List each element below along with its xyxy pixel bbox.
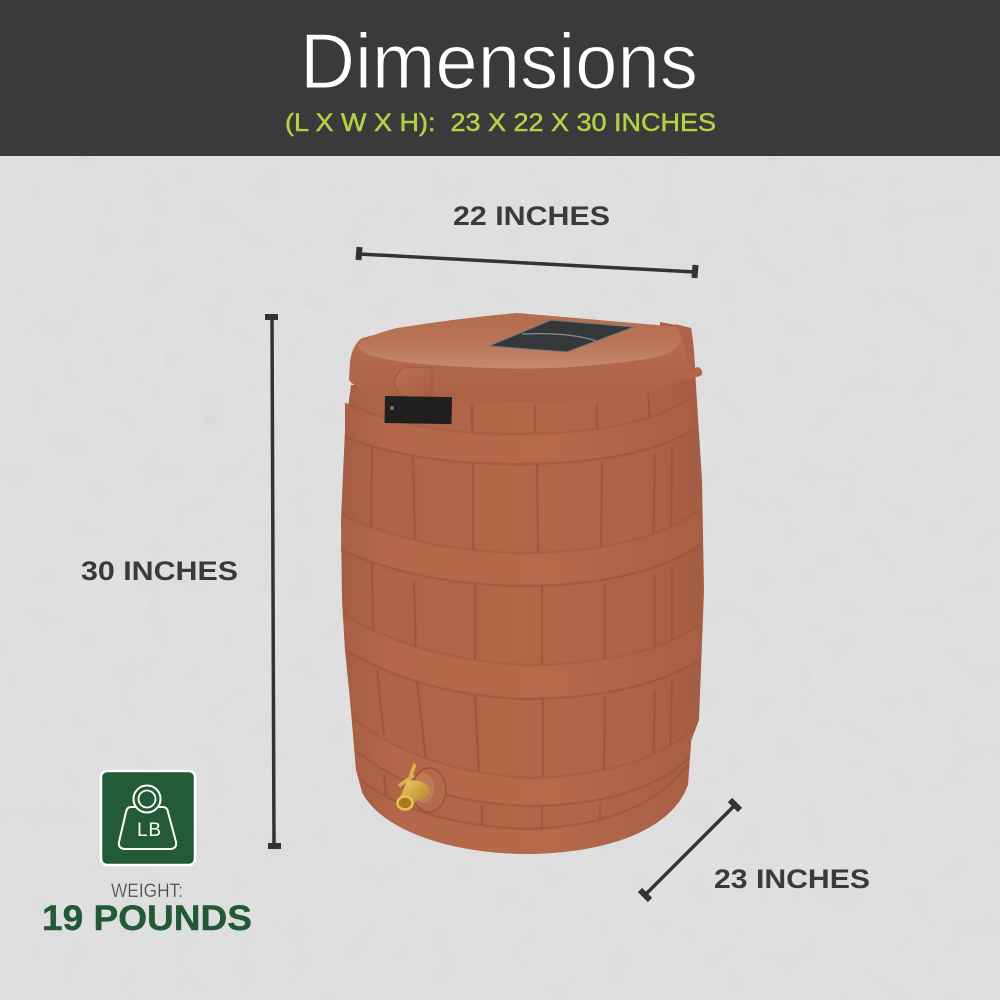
inlet screen bbox=[489, 320, 634, 352]
hoop 1 bbox=[345, 397, 693, 464]
lid top surface bbox=[358, 313, 692, 369]
weight value: 19 POUNDS bbox=[42, 899, 252, 938]
dimension arrow: length bbox=[640, 800, 740, 900]
stave seams bbox=[371, 393, 672, 830]
front handle bbox=[395, 367, 432, 398]
brass spigot bbox=[398, 764, 446, 812]
dimension label: height: 30 INCHES bbox=[81, 556, 238, 586]
black vent label bbox=[385, 396, 452, 424]
header band bbox=[0, 0, 1000, 156]
weight caption: WEIGHT: bbox=[111, 881, 183, 902]
lid rear tab edge bbox=[675, 324, 695, 372]
bottom band bbox=[361, 765, 688, 854]
dimension arrow: width bbox=[358, 247, 696, 278]
barrel body bbox=[341, 385, 700, 854]
rain barrel illustration bbox=[341, 313, 704, 854]
dimension label: width: 22 INCHES bbox=[453, 201, 610, 231]
hoop 3 bbox=[344, 615, 700, 699]
subtitle: overall dimensions: (L X W X H): 23 X 22 X 30 INCHES bbox=[285, 109, 716, 137]
dimension label: length: 23 INCHES bbox=[714, 864, 870, 894]
weight icon bbox=[101, 771, 195, 865]
lid rim bbox=[349, 314, 687, 402]
hoop edge shading bbox=[341, 397, 700, 829]
dimension arrow: height bbox=[265, 316, 281, 847]
hoop 4 bbox=[353, 718, 692, 806]
overflow spout bbox=[684, 367, 702, 381]
weight icon: LB bbox=[137, 820, 161, 841]
back overflow tab bbox=[660, 322, 704, 770]
title: Dimensions bbox=[300, 17, 698, 105]
hoop 2 bbox=[341, 510, 700, 586]
